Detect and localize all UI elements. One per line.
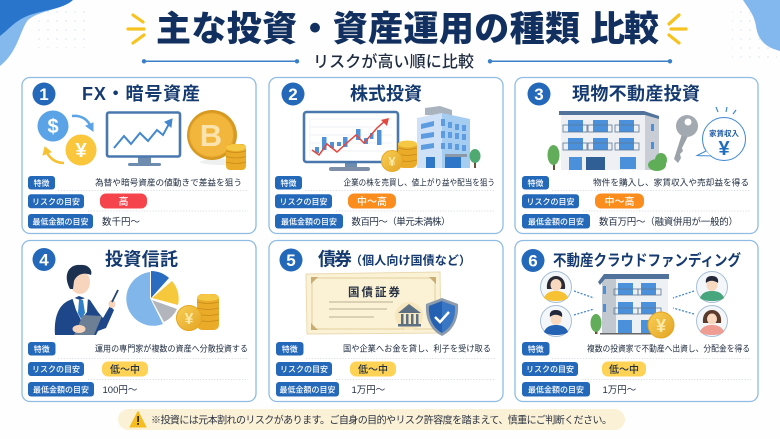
icon: bitcoin coin	[187, 110, 246, 170]
title: 比較	[590, 10, 659, 49]
row: 最低金額の目安	[275, 214, 450, 228]
row: リスクの目安: リスクの目安	[280, 196, 328, 206]
icon: coins: ¥	[388, 154, 396, 169]
number badge 3	[528, 82, 550, 106]
row: リスクの目安: リスクの目安	[526, 364, 574, 374]
subtitle: リスクが高い順に比較	[313, 52, 474, 71]
heading	[318, 250, 471, 270]
row: リスクの目安	[276, 362, 396, 376]
row: 特徴: 為替や暗号資産の値動きで差益を狙う	[95, 176, 242, 188]
icon: government bond certificate: 国債証券	[348, 285, 400, 299]
row: リスクの目安	[28, 194, 147, 208]
icon: right title sparkle	[669, 15, 686, 43]
icon: yen coins: ¥	[185, 311, 194, 328]
row: 特徴: 特徴	[528, 344, 544, 354]
icon: apartment building	[548, 111, 667, 171]
icon: warning triangle	[130, 412, 146, 427]
row: 最低金額の目安	[28, 382, 138, 396]
row: 特徴	[522, 176, 749, 190]
row: 最低金額の目安	[276, 382, 386, 396]
row: リスクの目安: リスクの目安	[526, 196, 574, 206]
row: リスクの目安: 低～中	[358, 363, 388, 376]
row: 最低金額の目安: 数百万円～（融資併用が一般的）	[599, 216, 738, 228]
row: リスクの目安	[28, 362, 148, 376]
row: リスクの目安: 低～中	[609, 363, 639, 376]
icon: shield	[426, 298, 458, 336]
row: リスクの目安: 低～中	[110, 363, 140, 376]
heading: FX・暗号資産	[82, 84, 200, 104]
icon: currency exchange: $	[47, 116, 59, 138]
subtitle rule right	[488, 59, 672, 64]
icon: key	[674, 115, 698, 163]
icon: coins	[382, 140, 417, 172]
number badge 4: 4	[39, 250, 49, 270]
row: 最低金額の目安: 最低金額の目安	[33, 384, 89, 394]
icon: left title sparkle	[128, 15, 144, 43]
disclaimer bar	[118, 409, 625, 430]
row: 特徴: 特徴	[34, 178, 50, 188]
heading: （個人向け国債など）	[350, 252, 471, 268]
number badge 5: 5	[286, 251, 296, 270]
panel: 債券	[269, 240, 503, 402]
row: 特徴: 企業の株を売買し、値上がり益や配当を狙う	[344, 176, 495, 188]
row: リスクの目安	[522, 362, 646, 376]
icon: advisor man	[55, 265, 118, 335]
row: 最低金額の目安	[522, 214, 738, 228]
row: リスクの目安: リスクの目安	[32, 196, 80, 206]
row: 特徴: 国や企業へお金を貸し、利子を受け取る	[343, 342, 491, 354]
icon: investor top right	[696, 272, 728, 302]
row: 特徴	[28, 176, 242, 190]
row: 特徴	[275, 176, 495, 190]
icon: stock chart monitor	[304, 112, 398, 171]
panel: 現物不動産投資	[515, 78, 758, 234]
heading: 債券	[318, 250, 352, 270]
icon: rent income bubble	[697, 107, 746, 160]
row: 最低金額の目安: 最低金額の目安	[528, 216, 584, 226]
row: 特徴: 運用の専門家が複数の資産へ分散投資する	[95, 342, 248, 354]
number badge 6: 6	[528, 252, 538, 270]
icon: rent income bubble: ¥	[718, 138, 730, 160]
number badge 2: 2	[288, 85, 298, 104]
row: リスクの目安: 高	[118, 195, 128, 208]
row: 特徴	[28, 342, 248, 356]
row: 最低金額の目安: 最低金額の目安	[281, 216, 337, 226]
number badge 4	[32, 248, 56, 271]
number badge 5	[280, 248, 302, 272]
row: 最低金額の目安: 最低金額の目安	[32, 216, 88, 226]
row: リスクの目安	[275, 194, 396, 208]
row: 最低金額の目安: 1万円～	[602, 385, 637, 396]
icon: currency exchange	[38, 110, 96, 166]
background blobs	[0, 0, 780, 66]
row: 特徴	[276, 342, 491, 356]
row: 最低金額の目安: 最低金額の目安	[280, 384, 336, 394]
heading: 投資信託	[105, 250, 178, 270]
row: リスクの目安: リスクの目安	[32, 364, 80, 374]
subtitle rule left	[142, 59, 299, 64]
panel: 投資信託	[22, 240, 256, 402]
row: 最低金額の目安: 数百円～（単元未満株）	[352, 216, 450, 228]
row: 特徴: 複数の投資家で不動産へ出資し、分配金を得る	[587, 342, 750, 354]
row: 最低金額の目安	[522, 382, 637, 396]
row: 特徴: 特徴	[34, 344, 50, 354]
icon: government bond certificate	[306, 272, 441, 334]
row: 最低金額の目安: 数千円～	[102, 216, 141, 228]
row: リスクの目安: リスクの目安	[280, 364, 328, 374]
icon: investor bottom left	[540, 306, 572, 336]
dotted connectors	[574, 291, 694, 315]
number badge 1: 1	[39, 85, 49, 104]
row: 最低金額の目安: 最低金額の目安	[528, 384, 584, 394]
row: 特徴: 特徴	[528, 178, 544, 188]
disclaimer text: ※投資には元本割れのリスクがあります。ご自身の目的やリスク許容度を踏まえて、慎重にご判断ください。	[151, 413, 612, 426]
icon: investor bottom right	[696, 306, 728, 336]
number badge 2	[282, 82, 304, 106]
row: リスクの目安	[522, 194, 644, 208]
title: 主な投資・資産運用の種類	[156, 10, 580, 49]
row: 特徴	[522, 342, 750, 356]
icon: yen coins	[176, 294, 219, 330]
panel: 株式投資	[269, 78, 503, 234]
icon: currency exchange: ¥	[75, 140, 87, 162]
panel: 不動産クラウドファンディング	[515, 240, 758, 402]
heading: 現物不動産投資	[572, 84, 700, 104]
icon: office building	[417, 106, 480, 168]
row: 最低金額の目安	[28, 214, 141, 228]
row: リスクの目安: 中～高	[604, 195, 634, 208]
number badge 6	[522, 249, 544, 272]
number badge 3: 3	[534, 85, 544, 104]
heading: 株式投資	[350, 84, 422, 104]
icon: investor top left	[540, 272, 572, 302]
icon: apartment with coin	[590, 274, 674, 338]
icon: apartment with coin: ¥	[656, 316, 666, 336]
icon: monitor with chart	[107, 112, 180, 166]
number badge 1	[32, 82, 56, 106]
panel: FX・暗号資産	[22, 78, 256, 234]
row: 特徴: 物件を購入し、家賃収入や売却益を得る	[593, 176, 749, 188]
row: リスクの目安: 中～高	[357, 195, 387, 208]
heading: 不動産クラウドファンディング	[553, 250, 741, 270]
pie chart	[126, 271, 179, 326]
row: 特徴: 特徴	[280, 178, 296, 188]
icon: bitcoin coin: B	[200, 118, 222, 153]
row: 最低金額の目安: 100円～	[102, 385, 138, 396]
row: 最低金額の目安: 1万円～	[352, 385, 386, 396]
icon: rent income bubble: 家賃収入	[709, 128, 739, 138]
row: 特徴: 特徴	[282, 344, 298, 354]
